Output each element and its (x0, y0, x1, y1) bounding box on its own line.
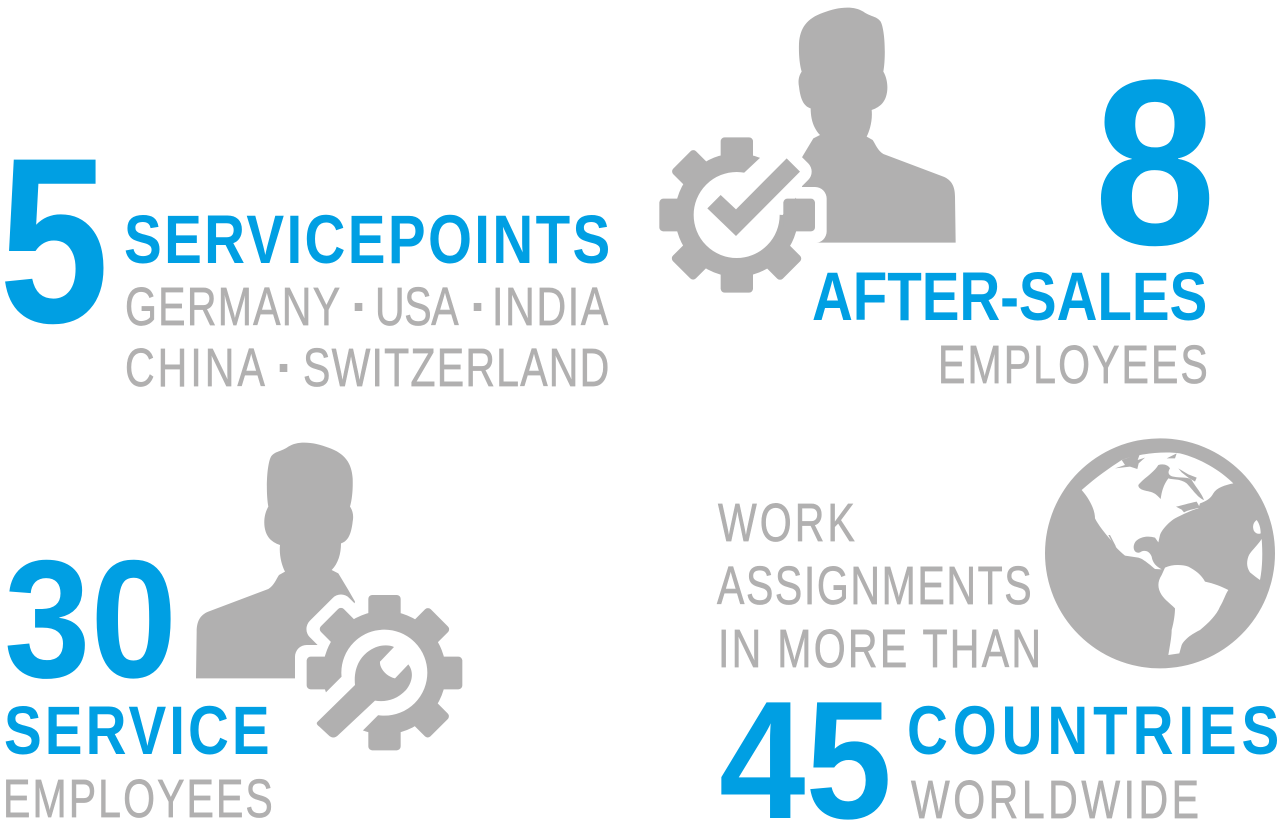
heading: service: SERVICE (4, 693, 270, 769)
panel: work assignments worldwide (717, 438, 1279, 837)
label: employees: EMPLOYEES (938, 336, 1208, 395)
text: work: WORK (718, 494, 855, 553)
baja california (1108, 535, 1116, 547)
countries line 1: · (351, 277, 369, 337)
wrench (317, 645, 412, 737)
text: assignments: ASSIGNMENTS (717, 557, 1032, 616)
big number 8: 8 (1094, 31, 1216, 295)
africa (1247, 539, 1262, 580)
text: in more than: IN MORE THAN (718, 620, 1041, 679)
hudson bay (1138, 464, 1204, 500)
great lakes (1176, 502, 1200, 512)
big number 30: 30 (4, 525, 177, 713)
check gear halo (678, 157, 815, 273)
heading: servicepoints: SERVICEPOINTS (124, 202, 610, 278)
person silhouette (196, 443, 355, 678)
ring gap (317, 677, 382, 733)
icon: person with wrench gear (196, 443, 462, 753)
gear teeth (659, 137, 803, 293)
countries line 1: · (470, 277, 488, 337)
countries line 1: USA (375, 278, 459, 337)
countries line 2: CHINA (125, 339, 265, 398)
arctic islands (1115, 454, 1145, 469)
south america (1158, 565, 1228, 655)
europe (1253, 520, 1261, 534)
north notch (1167, 453, 1177, 458)
gear teeth (307, 595, 462, 750)
person silhouette (797, 8, 956, 243)
countries line 1 (125, 277, 608, 337)
countries line 2 (125, 338, 609, 398)
big number 5: 5 (0, 109, 109, 373)
countries line 1: INDIA (492, 278, 608, 337)
heading: after-sales: AFTER-SALES (812, 259, 1207, 335)
label: employees: EMPLOYEES (3, 770, 273, 829)
north america (1082, 452, 1233, 569)
countries line 2: · (276, 338, 294, 398)
globe disc (1045, 438, 1275, 668)
ring gap (740, 147, 810, 215)
heading: countries: COUNTRIES (907, 693, 1279, 769)
check mark (707, 158, 800, 236)
icon: globe (1045, 438, 1275, 668)
baffin strait (1178, 468, 1197, 482)
panel: after-sales employees (659, 8, 1216, 395)
countries line 2: SWITZERLAND (303, 339, 609, 398)
panel: servicepoints (0, 109, 610, 398)
wrench gear halo (307, 606, 443, 731)
panel: service employees (3, 443, 462, 829)
gear ring (332, 620, 437, 725)
countries line 1: GERMANY (125, 278, 340, 337)
gear ring (684, 163, 789, 267)
label: worldwide: WORLDWIDE (911, 771, 1199, 830)
icon: person with check gear (659, 8, 956, 293)
gear right tooth (783, 199, 815, 231)
